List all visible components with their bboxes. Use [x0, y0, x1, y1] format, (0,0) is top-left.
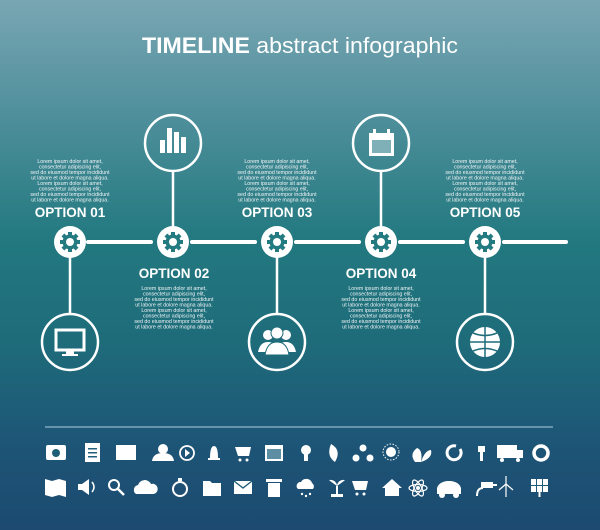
option titles: OPTION 01 [35, 205, 106, 220]
text block 01: Lorem ipsum dolor sit amet, [37, 181, 103, 187]
option titles: OPTION 05 [450, 205, 521, 220]
text block 04: Lorem ipsum dolor sit amet, [348, 308, 414, 314]
text block 01: sed do eiusmod tempor incididunt [30, 192, 110, 198]
icon row 1 [46, 443, 548, 462]
icon circle: monitor [42, 314, 98, 370]
icon circle: bar chart [145, 115, 201, 171]
text block 05: consectetur adipiscing elit, [454, 164, 516, 170]
timeline line [88, 240, 566, 244]
option titles: OPTION 02 [139, 266, 209, 281]
text block 03: Lorem ipsum dolor sit amet, [244, 181, 310, 187]
text block 05: Lorem ipsum dolor sit amet, [452, 181, 518, 187]
icon row 2 [45, 476, 548, 498]
option titles: OPTION 03 [242, 205, 313, 220]
text block 03: consectetur adipiscing elit, [246, 164, 308, 170]
connectors [70, 171, 485, 314]
text block 03: ut labore et dolore magna aliqua. [238, 176, 316, 182]
text block 05: sed do eiusmod tempor incididunt [445, 170, 525, 176]
text block 01: ut labore et dolore magna aliqua. [31, 176, 109, 182]
text block 02: sed do eiusmod tempor incididunt [134, 297, 214, 303]
text block 05: sed do eiusmod tempor incididunt [445, 192, 525, 198]
text block 01 [30, 159, 110, 204]
text block 01: Lorem ipsum dolor sit amet, [37, 159, 103, 165]
text block 03: ut labore et dolore magna aliqua. [238, 198, 316, 204]
title: TIMELINE abstract infographic [142, 33, 458, 58]
text block 04: ut labore et dolore magna aliqua. [342, 324, 420, 330]
text block 04 [341, 286, 421, 330]
text block 03: Lorem ipsum dolor sit amet, [244, 159, 310, 165]
text block 02: ut labore et dolore magna aliqua. [135, 324, 213, 330]
option titles [35, 205, 521, 281]
text block 01: ut labore et dolore magna aliqua. [31, 198, 109, 204]
text block 02: consectetur adipiscing elit, [143, 292, 205, 298]
icon circle: globe [457, 314, 513, 370]
text block 02: Lorem ipsum dolor sit amet, [141, 286, 207, 292]
text block 02 [134, 286, 214, 330]
text block 02: Lorem ipsum dolor sit amet, [141, 308, 207, 314]
text block 05: Lorem ipsum dolor sit amet, [452, 159, 518, 165]
text block 05: consectetur adipiscing elit, [454, 186, 516, 192]
text block 04: Lorem ipsum dolor sit amet, [348, 286, 414, 292]
text block 02: sed do eiusmod tempor incididunt [134, 319, 214, 325]
gear nodes [54, 226, 501, 258]
text block 01: consectetur adipiscing elit, [39, 186, 101, 192]
text block 05 [445, 159, 525, 204]
text block 03: sed do eiusmod tempor incididunt [237, 170, 317, 176]
text block 04: sed do eiusmod tempor incididunt [341, 319, 421, 325]
text block 05: ut labore et dolore magna aliqua. [446, 198, 524, 204]
text block 04: sed do eiusmod tempor incididunt [341, 297, 421, 303]
text block 03 [237, 159, 317, 204]
text block 01: consectetur adipiscing elit, [39, 164, 101, 170]
text block 02: consectetur adipiscing elit, [143, 314, 205, 320]
option titles: OPTION 04 [346, 266, 417, 281]
text block 02: ut labore et dolore magna aliqua. [135, 302, 213, 308]
text block 03: sed do eiusmod tempor incididunt [237, 192, 317, 198]
text block 04: consectetur adipiscing elit, [350, 314, 412, 320]
text block 03: consectetur adipiscing elit, [246, 186, 308, 192]
text block 04: ut labore et dolore magna aliqua. [342, 302, 420, 308]
icon circle: calendar [353, 115, 409, 171]
text block 01: sed do eiusmod tempor incididunt [30, 170, 110, 176]
icon circle: people [249, 314, 305, 370]
text block 04: consectetur adipiscing elit, [350, 292, 412, 298]
text block 05: ut labore et dolore magna aliqua. [446, 176, 524, 182]
